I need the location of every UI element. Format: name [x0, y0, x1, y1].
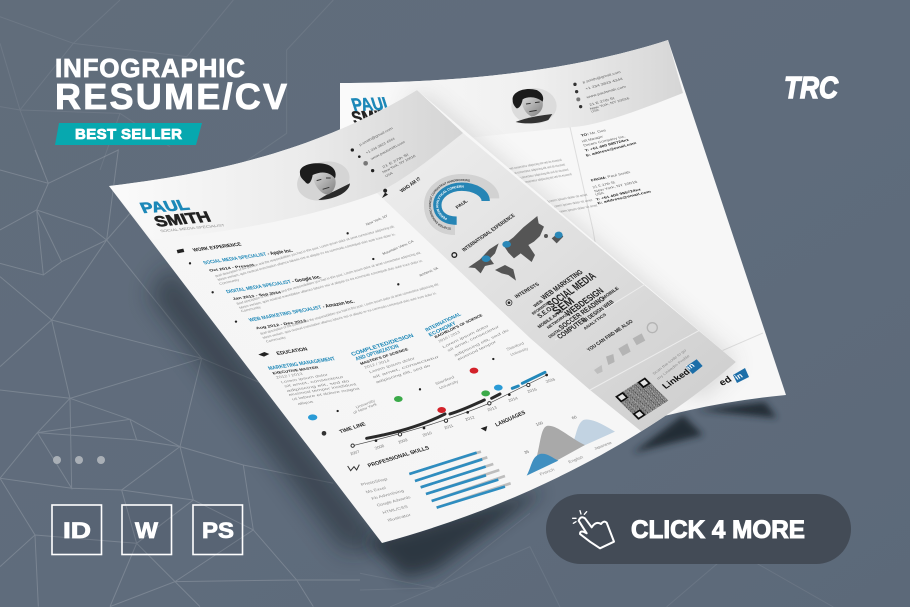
- degree 3: eiusmod tempor: [457, 340, 498, 361]
- front sheet paper: [109, 90, 736, 543]
- back sheet name: PAUL: [349, 94, 395, 116]
- TRC logo: TRC: [784, 70, 839, 105]
- international experience heading: [452, 213, 517, 257]
- back sheet contact details: USA: [590, 108, 600, 113]
- back sheet to and from block: T: +61 400 985724xx: [595, 188, 642, 201]
- right column content: [360, 174, 702, 460]
- university labels: University: [355, 398, 376, 409]
- front contact details: 21 E 27th St: [382, 153, 409, 169]
- name SMITH: SMITH: [152, 209, 214, 230]
- back sheet shadow: [697, 402, 777, 418]
- back sheet letter body text: Lorem ipsum dolor sit amet: [547, 193, 588, 203]
- skill labels: Google Adwords: [376, 495, 411, 507]
- front contact details: USA: [384, 171, 394, 178]
- back sheet name: SMITH: [349, 107, 403, 129]
- job 1: New York, NY: [365, 214, 389, 226]
- donut outer labels: STARTER ENDURING HONEST CONSISTENT HARDWORKING: [428, 179, 470, 230]
- social icons: [594, 323, 657, 374]
- interests word cloud: WEBDESIGN: [563, 286, 606, 319]
- icon: PS: [193, 505, 242, 554]
- linkedin call out: my LinkedIn Profile: [656, 354, 690, 381]
- university labels: [352, 341, 529, 415]
- university labels: of New York: [352, 402, 378, 415]
- languages chart: [481, 410, 615, 476]
- languages heading: LANGUAGES: [495, 410, 527, 428]
- language values: [523, 414, 578, 455]
- back sheet letter body text: [482, 158, 598, 214]
- degree 1: MARKETING MANAGEMENT: [267, 357, 337, 372]
- title: RESUME/CV: [55, 76, 287, 117]
- interests word cloud: COMPUTER: [555, 316, 589, 341]
- education section: [258, 333, 529, 415]
- icon: W: [122, 505, 172, 554]
- degree 3: ECONOMY: [428, 321, 458, 338]
- icon: ID: ID: [63, 518, 91, 543]
- shadow of front sheet on back sheet: [400, 90, 736, 400]
- interests word cloud: S.E.O.: [536, 305, 555, 320]
- dark timeline bars: [367, 394, 500, 438]
- lower right panel divider: [555, 275, 700, 390]
- back sheet name: [349, 94, 403, 129]
- job 2: Brief description of the position and the responsibilities you had in this post. Lorem ipsum dolor sit amet consectetur adipiscing elit.: [236, 251, 422, 306]
- back sheet contact details: p.smith@gmail.com: [582, 70, 622, 84]
- front sheet bottom shadow: [365, 490, 545, 578]
- find me heading: YOU CAN FIND ME ALSO: [586, 319, 635, 353]
- icon: ID: [52, 505, 102, 554]
- icon: PS: PS: [202, 518, 234, 543]
- linkedin call out: [651, 348, 703, 391]
- education heading: EDUCATION: [276, 347, 309, 357]
- donut outer ring: [430, 180, 493, 229]
- name PAUL: PAUL: [138, 198, 192, 217]
- who am i heading: [382, 176, 423, 198]
- back sheet linkedin logo: ed: [717, 375, 734, 388]
- timeline dots: [336, 358, 548, 442]
- back sheet letter body text: Lorem ipsum dolor sit amet consectetur adipiscing elit sed do eiusmod: [492, 173, 573, 189]
- front contact details: www.paulsmith.com: [370, 140, 406, 161]
- language labels: Japanese: [593, 440, 613, 451]
- front sheet header band: [109, 90, 463, 222]
- university labels: Stanford: [434, 374, 455, 386]
- degree 3: 2010 / 2013: [438, 330, 461, 343]
- job 1: Oct 2014 - Present: [208, 262, 256, 272]
- degree 1: 2012 / 2013: [275, 371, 304, 379]
- back sheet: [340, 40, 786, 440]
- interests word cloud: INFORMATION: [531, 300, 552, 316]
- skill bars blue fill: [409, 453, 505, 508]
- click button: [546, 494, 851, 564]
- degree 2: MASTER'S OF SCIENCE: [359, 347, 410, 366]
- best seller ribbon: [55, 123, 202, 145]
- job 1: Minim veniam, quis nostrud exercitation ullamco laboris nisi ut aliquip ex ea commodo consequat duis aute irure dolor in.: [217, 233, 396, 282]
- skill labels: Fb Advertising: [370, 488, 406, 501]
- english hump: [535, 426, 585, 462]
- degree 2: sit amet, consectetur: [371, 354, 441, 379]
- french hump: [527, 454, 558, 476]
- qr code: [615, 377, 668, 420]
- language values: 35: [523, 449, 531, 455]
- degree 1: EXECUTIVE MASTER: [271, 365, 320, 375]
- degree 1: eiusmod tempor incididunt: [287, 382, 359, 397]
- back sheet contact details: New York, NY 10016: [589, 97, 630, 111]
- year labels: 2009: [397, 437, 409, 444]
- low-poly line pattern: [0, 150, 360, 607]
- degree 2: COMPLETED/DESIGN: [350, 333, 415, 358]
- job 2: DIGITAL MEDIA SPECIALIST - Google Inc.: [225, 275, 323, 295]
- back sheet to and from block: FROM: Paul Smith: [590, 170, 631, 182]
- skill labels: HTML/CSS: [381, 504, 409, 515]
- back sheet letter body text: Lorem ipsum dolor sit amet: [552, 198, 593, 208]
- back sheet paper: [340, 40, 786, 440]
- job 3: Aug 2012 - Dec 2013: [255, 318, 308, 330]
- professional skills chart: [348, 446, 511, 522]
- back sheet to and from block: T: +61 400 985724xx: [584, 138, 630, 152]
- back sheet to and from block: E: address@email.com: [597, 190, 652, 205]
- year labels: 2012: [464, 415, 476, 422]
- skills icon: [348, 465, 359, 471]
- job 2: Minim veniam, quis nostrud exercitation ullamco laboris nisi ut aliquip ex ea commodo consequat duis aute irure dolor in.: [238, 259, 424, 310]
- map highlights: [482, 232, 563, 262]
- back sheet letter body text: Lorem ipsum dolor sit amet consectetur adipiscing elit sed do eiusmod: [482, 158, 563, 175]
- work experience section: [177, 214, 440, 343]
- title: INFOGRAPHIC: [55, 53, 245, 83]
- back sheet to and from block: HR Manager: [581, 135, 605, 143]
- donut inner labels: PERSON ANALYTICAL CONCERN: [436, 185, 464, 220]
- back sheet contact details: [573, 70, 630, 113]
- degree 1: Lorem ipsum dolor: [280, 372, 330, 384]
- front contact details: New York, NY 10016: [382, 154, 416, 174]
- japanese hump: [567, 420, 615, 453]
- icon: W: W: [135, 518, 158, 543]
- front contact details: p.smith@gmail.com: [358, 126, 394, 147]
- degree 1: adipiscing elit, sed do: [285, 379, 350, 393]
- back sheet portrait: [511, 88, 557, 124]
- degree 3: INTERNATIONAL: [424, 312, 463, 333]
- year labels: 2011: [443, 423, 455, 430]
- degree 1: sit amet, consectetur: [283, 374, 346, 388]
- best seller ribbon: BEST SELLER: [75, 126, 182, 143]
- graduation cap icon: [258, 352, 269, 357]
- world map: [468, 216, 563, 281]
- contact icons: [573, 83, 582, 108]
- front contact details: [351, 126, 416, 178]
- back sheet letter body text: Lorem ipsum dolor sit amet: [557, 204, 598, 214]
- contact icons: [351, 148, 374, 172]
- back sheet contact details: 21 E 27th St: [588, 96, 615, 107]
- skill labels: [360, 476, 413, 522]
- coloured pins: [308, 368, 503, 420]
- back sheet to and from block: New York, NY 10016: [593, 180, 638, 193]
- degree 3: Lorem ipsum dolor: [442, 324, 491, 349]
- work experience heading: WORK EXPERIENCE: [192, 242, 243, 253]
- skill bars grey track: [409, 452, 511, 508]
- blue timeline bars: [512, 372, 545, 388]
- interests word cloud: MOBILE APPS: [537, 309, 565, 330]
- timeline dots: [189, 232, 399, 323]
- language labels: French: [539, 467, 556, 476]
- back sheet contact details: www.paulsmith.com: [586, 85, 627, 99]
- briefcase icon: [177, 249, 184, 253]
- degree 3: adipiscing elit, sed do: [453, 329, 510, 357]
- back sheet to and from block: Dream Company Inc.: [582, 135, 627, 147]
- job 2: Mountain View, CA: [382, 239, 415, 256]
- year labels: 2007: [349, 449, 361, 456]
- back sheet linkedin logo: in: [733, 371, 745, 382]
- back sheet to and from block: [580, 129, 652, 205]
- degree 1: ut labore et dolore magna: [291, 386, 362, 401]
- university labels: University: [509, 346, 529, 357]
- interests heading: [506, 282, 541, 306]
- degree 1: [267, 357, 362, 406]
- degree 2: adipiscing elit, sed do: [375, 363, 431, 384]
- donut center label: PAUL: [455, 199, 470, 210]
- year labels: 2014: [507, 396, 519, 403]
- job 1: SOCIAL MEDIA SPECIALIST - Apple Inc.: [202, 248, 295, 266]
- back sheet header band: [340, 40, 683, 150]
- back sheet to and from block: TO: Mr. Doe: [580, 129, 607, 137]
- university labels: Stanford: [505, 341, 525, 351]
- skills heading: PROFESSIONAL SKILLS: [367, 446, 431, 469]
- job 3: Community: [265, 336, 287, 343]
- interests word cloud: [531, 268, 621, 341]
- year labels: 2016: [545, 377, 557, 384]
- timeline heading: TIME LINE: [339, 422, 367, 435]
- back sheet to and from block: 21 E 27th St: [592, 181, 616, 189]
- back column divider: [570, 127, 763, 395]
- year labels: 2013: [486, 405, 498, 412]
- job 2: Jan 2013 - Sep 2014: [231, 290, 283, 301]
- interests word cloud: ANALYTICS: [582, 312, 607, 331]
- front sheet: [109, 90, 736, 585]
- job subtitle: SOCIAL MEDIA SPECIALIST: [159, 223, 226, 233]
- timeline chart: [308, 358, 557, 456]
- language labels: [539, 440, 613, 476]
- linkedin call out: in: [684, 361, 697, 371]
- degree 2: AND OPTIMIZATION: [355, 344, 400, 362]
- back sheet contact details: +1 234 3823 4344: [584, 77, 624, 91]
- degree 1: aliqua: [296, 399, 315, 406]
- international experience heading: INTERNATIONAL EXPERIENCE: [461, 213, 517, 253]
- donut blue ring: [437, 187, 486, 221]
- back sheet letter body text: Lorem ipsum dolor sit amet consectetur adipiscing elit sed do eiusmod: [485, 163, 566, 180]
- job 3: Amherst, VA: [418, 266, 439, 277]
- interests word cloud: SOCCER READING: [557, 295, 607, 331]
- title: [55, 53, 287, 117]
- linkedin call out: Linked: [660, 367, 692, 391]
- interests word cloud: UI DESIGN WEB: [581, 299, 616, 324]
- portrait and name header: [138, 156, 354, 233]
- job 3: WEB MARKETING SPECIALIST - Amazon Inc.: [248, 299, 356, 323]
- front sheet left shadow: [150, 265, 382, 552]
- icon: pointing hand: [573, 511, 614, 548]
- back sheet linkedin logo: [717, 368, 749, 388]
- degree 2: [350, 333, 441, 384]
- skill labels: Ms Excel: [365, 485, 387, 494]
- job 3: Brief description of the position and the responsibilities you had in this post. Lorem ipsum dolor sit amet consectetur adipiscing elit.: [259, 282, 440, 336]
- degree 2: 2012 / 2014: [363, 358, 391, 369]
- year labels: [349, 377, 557, 456]
- timeline nodes: [351, 383, 530, 447]
- button label: CLICK 4 MORE: [631, 516, 805, 544]
- interests word cloud: WEB: [532, 299, 544, 308]
- year labels: 2015: [526, 387, 538, 394]
- year labels: 2010: [421, 430, 433, 437]
- back sheet to and from block: E: address@email.com: [585, 141, 637, 157]
- degree 2: Lorem ipsum dolor: [368, 356, 417, 374]
- back sheet letter body text: Lorem ipsum dolor sit amet consectetur adipiscing elit sed do eiusmod: [488, 168, 569, 185]
- language labels: English: [567, 454, 585, 464]
- skill labels: Illustrator: [386, 512, 413, 522]
- job 1: Community: [218, 278, 240, 286]
- front portrait: [293, 156, 354, 206]
- language values: 60: [571, 414, 578, 420]
- personality donut chart: [424, 174, 500, 235]
- front sheet right column: [377, 133, 736, 440]
- degree 3: [424, 312, 510, 361]
- interests word cloud: SOCIAL MEDIA: [545, 270, 599, 310]
- language values: 100: [535, 420, 545, 427]
- degree 3: sit amet, consectetur: [447, 324, 501, 352]
- job 3: Minim veniam, quis nostrud exercitation ullamco laboris nisi ut aliquip ex ea commodo consequat duis aute irure dolor in.: [262, 292, 438, 340]
- speech icon: [481, 426, 487, 431]
- interests word cloud: SEM: [550, 295, 577, 317]
- interests word cloud: MOBILE: [601, 286, 621, 301]
- back sheet to and from block: USA: [594, 191, 606, 196]
- degree 3: BACHELOR'S OF SCIENCE: [434, 313, 484, 339]
- timeline icon: [322, 431, 326, 436]
- interests heading: INTERESTS: [514, 282, 541, 300]
- front sheet lower shadow: [633, 415, 703, 453]
- job 1: Brief description of the position and the responsibilities you had in this post. Lorem ipsum dolor sit amet consectetur adipiscing elit.: [214, 225, 396, 278]
- pagination dots: [53, 456, 105, 464]
- timeline axis: [353, 375, 547, 446]
- interests word cloud: WEB MARKETING: [539, 268, 585, 301]
- job 3: [248, 266, 440, 343]
- skill labels: PhotoShop: [360, 476, 389, 487]
- job 2: Community: [240, 305, 262, 313]
- qr finder squares: [617, 379, 667, 419]
- interests word cloud: DIGITAL: [547, 327, 563, 339]
- university labels: University: [438, 379, 459, 390]
- year labels: 2008: [374, 443, 386, 450]
- front contact details: +1 234 3823 4344: [365, 137, 396, 155]
- who am i heading: WHO AM I?: [399, 176, 423, 194]
- interests word cloud: NETWORKS: [546, 312, 569, 330]
- linkedin call out: Scan the code to go: [651, 348, 687, 376]
